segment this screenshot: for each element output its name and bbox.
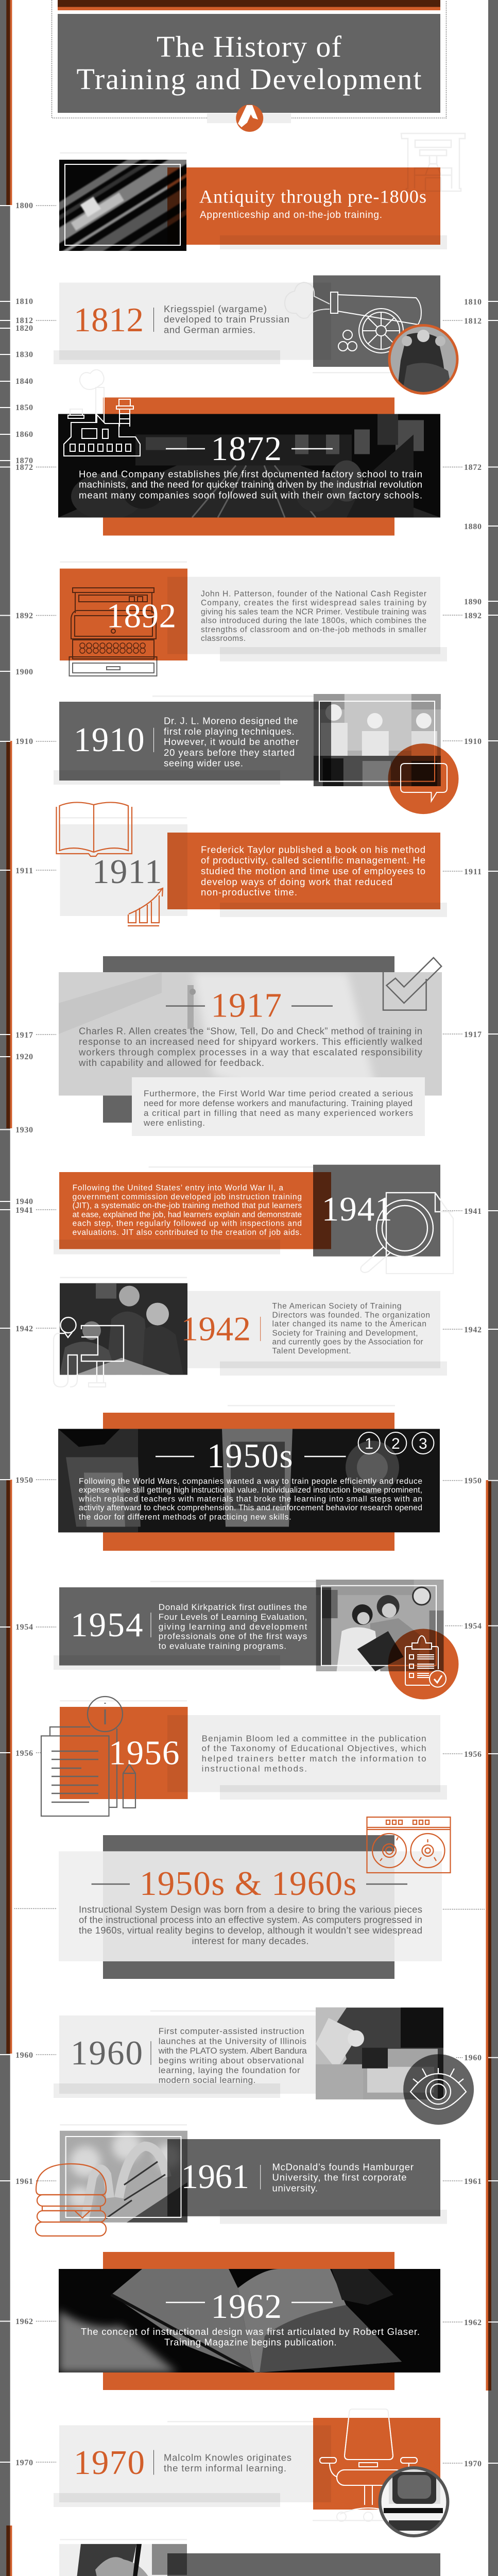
right year ticks and labels: 1956 bbox=[464, 1750, 482, 1759]
left year ticks and labels: 1941 bbox=[15, 1206, 33, 1215]
left year ticks and labels: 1812 bbox=[15, 316, 33, 325]
text: job instruction training: (JIT), a systematic on-the-job training method that put learners bbox=[73, 1201, 302, 1210]
text: glaser bbox=[81, 2326, 420, 2348]
text: hoe and company: machinists, and the need for quicker training driven by the industrial revolution bbox=[79, 479, 422, 490]
panel: 1910 grey bbox=[59, 702, 331, 781]
year: 1956: 1956 bbox=[109, 1734, 179, 1772]
text: allen: Charles R. Allen creates the “Show, Tell, Do and Check” method of training in bbox=[79, 1025, 422, 1036]
photo: couple with book bbox=[316, 1580, 444, 1671]
text: kirkpatrick: professionals one of the first ways bbox=[159, 1632, 307, 1641]
left year ticks and labels: 1970 bbox=[15, 2459, 33, 2467]
photo: desk with floppy disks bbox=[316, 2007, 443, 2099]
right year ticks and labels: 1880 bbox=[464, 522, 482, 531]
text: hamburger university: McDonald’s founds Hamburger bbox=[272, 2162, 414, 2172]
year: 1942: 1942 bbox=[181, 1310, 251, 1348]
title panel bbox=[58, 14, 440, 113]
left year ticks and labels: 1920 bbox=[15, 1053, 33, 1061]
text: hamburger university: university. bbox=[272, 2182, 318, 2193]
heading: antiquity: Antiquity through pre-1800s bbox=[199, 187, 426, 207]
left year ticks and labels: 1950 bbox=[15, 1476, 33, 1485]
text: kirkpatrick: to evaluate training programs. bbox=[159, 1641, 286, 1651]
text: hamburger university: University, the first corporate bbox=[272, 2172, 407, 2183]
right year ticks and labels bbox=[443, 298, 498, 2576]
right year ticks and labels: 1950 bbox=[464, 1477, 482, 1485]
photo: workers bbox=[313, 694, 441, 786]
left year ticks and labels: 1917 bbox=[15, 1031, 33, 1040]
icon: printing press ghost bbox=[401, 133, 465, 191]
left year ticks and labels: 1954 bbox=[15, 1623, 33, 1632]
circle with speech bubble icon bbox=[388, 743, 458, 814]
text: kriegsspiel: developed to train Prussian bbox=[164, 314, 289, 325]
icon: magnifier on document bbox=[360, 1193, 453, 1274]
text: patterson: giving his sales team the NCR Primer. Vestibule training was bbox=[201, 607, 426, 616]
icon: numbered circles: 3 bbox=[419, 1435, 427, 1452]
photo: vintage computer oval bbox=[380, 2468, 448, 2536]
text: american society bbox=[272, 1302, 430, 1355]
text: american society: The American Society of Training bbox=[272, 1302, 402, 1311]
text: bloom: helped trainers better match the information to bbox=[202, 1754, 426, 1764]
text: taylor: studied the motion and time use of employees to bbox=[201, 866, 425, 876]
text: plato and bandura bbox=[158, 2026, 307, 2085]
text: allen: with capability and allowed for feedback. bbox=[78, 1057, 264, 1068]
text: american society: Talent Development. bbox=[272, 1347, 351, 1355]
left year ticks and labels: 1860 bbox=[15, 430, 33, 439]
text: bloom: instructional methods. bbox=[202, 1764, 307, 1773]
photo: shipyard bbox=[59, 972, 442, 1095]
circle with clipboard icon bbox=[388, 1629, 458, 1699]
text: first world war bbox=[143, 1089, 413, 1128]
text: moreno: first role playing techniques. bbox=[164, 726, 295, 737]
text: taylor: non-productive time. bbox=[201, 887, 297, 897]
text: moreno: seeing wider use. bbox=[164, 757, 243, 769]
text: hoe and company: meant many companies soon followed suit with their own factory schools. bbox=[79, 489, 422, 500]
text: moreno: Dr. J. L. Moreno designed the bbox=[164, 715, 298, 726]
right year ticks and labels: 1810 bbox=[464, 298, 482, 307]
text: instructional system design bbox=[79, 1904, 422, 1946]
year: 1911: 1911 bbox=[92, 853, 162, 891]
text: hoe and company: Hoe and Company establishes the first documented factory school to train bbox=[79, 468, 422, 479]
text: american society: and currently goes by the Association for bbox=[272, 1338, 423, 1347]
text: moreno: 20 years before they started bbox=[164, 747, 295, 758]
text: patterson: classrooms. bbox=[201, 634, 246, 643]
text: knowles bbox=[164, 2452, 291, 2473]
icon: numbered circles bbox=[358, 1432, 434, 1454]
photo: hand writing bbox=[59, 2544, 187, 2576]
text: patterson: John H. Patterson, founder of the National Cash Register bbox=[201, 589, 426, 599]
heading: 1950s and 1960s: 1950s & 1960s bbox=[140, 1865, 356, 1903]
section: 1917 bbox=[59, 956, 442, 1136]
text: hoe and company bbox=[79, 468, 422, 500]
left year ticks and labels: 1930 bbox=[15, 1126, 33, 1134]
text: allen: workers through complex processes in a way that escalated responsibility bbox=[78, 1047, 423, 1058]
icon: presenter with board bbox=[54, 1317, 124, 1387]
text: job instruction training: government commission developed job instruction training bbox=[73, 1193, 302, 1201]
right year ticks and labels: 1941 bbox=[464, 1207, 482, 1216]
text: job instruction training: evaluations. JIT also contributed to the creation of job aids. bbox=[73, 1228, 302, 1237]
text: moreno: However, it would be another bbox=[164, 736, 299, 747]
year: 1950s: 1950s bbox=[207, 1437, 293, 1475]
text: taylor: Frederick Taylor published a book on his method bbox=[201, 844, 425, 855]
section: 1812 bbox=[54, 275, 457, 397]
left year ticks and labels: 1911 bbox=[15, 867, 33, 875]
year: 1954: 1954 bbox=[71, 1606, 143, 1644]
icon: bulb, documents and pencil bbox=[41, 1697, 135, 1816]
text: job instruction training: at ease, explained the job, had learners explain and demonstrate bbox=[73, 1211, 302, 1219]
left year ticks and labels: 1962 bbox=[15, 2317, 33, 2326]
text: bloom: Benjamin Bloom led a committee in the publication bbox=[202, 1734, 426, 1743]
panel: 1954 grey bbox=[59, 1587, 331, 1666]
text: individualized instruction bbox=[78, 1477, 422, 1521]
left year ticks and labels: 1870 bbox=[15, 456, 33, 465]
section: 1872 bbox=[58, 370, 440, 536]
photo: open book bbox=[59, 2269, 440, 2372]
text: instructional system design: of the instructional process into an effective system. As computers progressed in bbox=[79, 1914, 422, 1925]
icon: office chair bbox=[320, 2409, 417, 2521]
year: 1941: 1941 bbox=[322, 1190, 392, 1228]
photo: portrait oval bbox=[389, 325, 457, 397]
text: first world war: a critical part in filling that need as many experienced workers bbox=[144, 1108, 413, 1118]
icon: laser disc player bbox=[367, 1817, 450, 1873]
text: kriegsspiel: Kriegsspiel (wargame) bbox=[164, 303, 267, 314]
year: 1892: 1892 bbox=[107, 597, 176, 635]
left year ticks and labels: 1942 bbox=[15, 1325, 33, 1333]
panel: 1983 grey bbox=[167, 2553, 440, 2576]
text: kirkpatrick bbox=[159, 1602, 307, 1651]
text: bloom bbox=[202, 1734, 426, 1773]
year: 1917: 1917 bbox=[211, 987, 282, 1025]
title: The History of bbox=[157, 30, 342, 63]
right year ticks and labels: 1954 bbox=[464, 1622, 482, 1631]
text: allen bbox=[78, 1025, 423, 1068]
panel: first world war bbox=[132, 1077, 425, 1136]
left year ticks and labels: 1872 bbox=[15, 463, 33, 472]
panel: 1961 grey bbox=[167, 2139, 440, 2216]
circle with eye icon bbox=[403, 2054, 474, 2125]
right year ticks and labels: 1962 bbox=[464, 2318, 482, 2327]
text: individualized instruction: the door for different methods of practicing new skills. bbox=[79, 1513, 291, 1521]
icon: cash register bbox=[69, 588, 157, 676]
right year ticks and labels: 1961 bbox=[464, 2177, 482, 2186]
section: 1960 bbox=[54, 2008, 474, 2125]
section: 1961 bbox=[36, 2124, 447, 2236]
text: plato and bandura: with the PLATO system. Albert Bandura bbox=[158, 2046, 307, 2056]
text: american society: Society for Training and Development, bbox=[272, 1329, 418, 1337]
text: taylor bbox=[201, 844, 425, 897]
photo: golden arches bbox=[60, 2131, 187, 2223]
left year ticks and labels: 1830 bbox=[15, 350, 33, 359]
right year ticks and labels: 1942 bbox=[464, 1326, 482, 1334]
right year ticks and labels: 1911 bbox=[464, 868, 482, 876]
year: 1872: 1872 bbox=[211, 430, 282, 468]
text: allen: response to an increased need for shipyard workers. This efficiently walked bbox=[79, 1036, 422, 1047]
text: instructional system design: Instructional System Design was born from a desire to bring the various pieces bbox=[79, 1904, 422, 1914]
text: glaser: Training Magazine begins publication. bbox=[164, 2337, 337, 2348]
left year ticks and labels bbox=[0, 201, 57, 2576]
icon: numbered circles: 2 bbox=[391, 1435, 400, 1452]
text: job instruction training: each step, then regularly followed up with inspections and bbox=[73, 1219, 302, 1228]
left year ticks and labels: 1961 bbox=[15, 2177, 33, 2186]
icon: logo bbox=[236, 105, 263, 132]
year: 1812: 1812 bbox=[74, 301, 144, 339]
icon: open book bbox=[57, 802, 132, 856]
right year ticks and labels: 1892 bbox=[464, 612, 482, 620]
text: hamburger university bbox=[272, 2162, 414, 2193]
photo: training meeting bbox=[60, 1283, 187, 1375]
text: knowles: the term informal learning. bbox=[164, 2463, 286, 2473]
left year ticks and labels: 1910 bbox=[15, 737, 33, 746]
text: taylor: of productivity, called scientific management. He bbox=[201, 855, 425, 866]
text: patterson: also introduced during the late 1800s, which combines the bbox=[201, 617, 426, 625]
text: kirkpatrick: Donald Kirkpatrick first outlines the bbox=[159, 1602, 307, 1612]
section: 1892 bbox=[60, 562, 447, 676]
text: first world war: were enlisting. bbox=[143, 1118, 205, 1128]
section: antiquity bbox=[32, 126, 465, 285]
section: 1911 bbox=[57, 802, 447, 926]
text: individualized instruction: expense while still getting high instructional value. Individualized instruction became prominent, bbox=[79, 1486, 422, 1495]
panel: antiquity orange bbox=[167, 167, 440, 245]
year: 1910: 1910 bbox=[74, 721, 145, 759]
text: instructional system design: the 1960s, virtual reality begins to develop, although it wouldn’t see widespread bbox=[79, 1925, 422, 1936]
left year ticks and labels: 1956 bbox=[15, 1749, 33, 1758]
section: 1983 bbox=[59, 2539, 447, 2576]
text: american society: Directors was founded. The organization bbox=[272, 1311, 430, 1320]
text: patterson: Company, creates the first widespread sales training by bbox=[201, 599, 426, 607]
icon: rising chart bbox=[128, 888, 163, 926]
right year ticks and labels: 1910 bbox=[464, 737, 482, 746]
right year ticks and labels: 1960 bbox=[464, 2054, 482, 2062]
icon: smoke ghost bbox=[285, 282, 330, 318]
text: apprenticeship: Apprenticeship and on-the-job training. bbox=[200, 210, 382, 221]
text: plato and bandura: First computer-assisted instruction bbox=[159, 2026, 304, 2036]
text: kriegsspiel: and German armies. bbox=[164, 325, 255, 335]
icon: checkmark bbox=[383, 958, 441, 1010]
text: moreno bbox=[164, 715, 299, 769]
text: plato and bandura: modern social learning. bbox=[159, 2075, 255, 2085]
left year ticks and labels: 1800 bbox=[15, 201, 33, 210]
header block: Training and Development bbox=[76, 62, 421, 96]
year: 1960: 1960 bbox=[71, 2034, 143, 2072]
text: job instruction training: Following the United States’ entry into World War II, a bbox=[73, 1183, 283, 1192]
year: 1970: 1970 bbox=[74, 2444, 145, 2482]
right year ticks and labels: 1872 bbox=[464, 463, 482, 472]
text: plato and bandura: begins writing about observational bbox=[159, 2056, 304, 2065]
left year ticks and labels: 1820 bbox=[15, 324, 33, 333]
text: american society: later changed its name to the American bbox=[272, 1320, 426, 1329]
text: instructional system design: interest for many decades. bbox=[192, 1935, 309, 1946]
section: 1941 bbox=[54, 1165, 453, 1274]
section: 1954 bbox=[54, 1580, 458, 1699]
header block bbox=[51, 0, 446, 132]
text: kirkpatrick: giving learning and development bbox=[159, 1622, 307, 1632]
section: 1950s and 1960s bbox=[59, 1817, 450, 1979]
section: 1956 bbox=[41, 1697, 447, 1816]
text: kirkpatrick: Four Levels of Learning Evaluation, bbox=[159, 1612, 307, 1622]
year: 1961: 1961 bbox=[181, 2158, 249, 2196]
icon: cannon bbox=[331, 292, 421, 353]
left year ticks and labels: 1810 bbox=[15, 297, 33, 306]
left year ticks and labels: 1840 bbox=[15, 377, 33, 386]
right year ticks and labels: 1890 bbox=[464, 598, 482, 606]
photo: metal type bbox=[59, 160, 186, 251]
text: plato and bandura: learning, laying the foundation for bbox=[159, 2065, 300, 2075]
left year ticks and labels: 1900 bbox=[15, 668, 33, 676]
text: glaser: The concept of instructional design was first articulated by Robert Glaser. bbox=[81, 2326, 420, 2337]
right year ticks and labels: 1812 bbox=[464, 317, 482, 326]
text: individualized instruction: Following the World Wars, companies wanted a way to train people efficiently and reduce bbox=[79, 1477, 422, 1486]
text: first world war: Furthermore, the First World War time period created a serious bbox=[144, 1089, 413, 1098]
right year ticks and labels: 1917 bbox=[464, 1030, 482, 1039]
text: plato and bandura: launches at the University of Illinois bbox=[159, 2037, 306, 2046]
text: individualized instruction: activity afterward to check comprehension. This and reinforcement behavior research opened bbox=[79, 1504, 422, 1513]
section: 1942 bbox=[54, 1277, 447, 1387]
text: patterson: strengths of classroom and on-the-job methods in smaller bbox=[201, 625, 426, 634]
photo: desk with papers bbox=[58, 1429, 440, 1532]
text: first world war: need for more defense workers and manufacturing. Training played bbox=[144, 1098, 413, 1108]
right year ticks and labels: 1970 bbox=[464, 2460, 482, 2468]
text: taylor: develop ways of doing work that reduced bbox=[201, 876, 392, 887]
text: job instruction training bbox=[73, 1183, 302, 1237]
icon: burger bbox=[36, 2164, 106, 2236]
text: knowles: Malcolm Knowles originates bbox=[164, 2452, 291, 2463]
section: 1962 bbox=[59, 2252, 440, 2390]
icon: factory bbox=[64, 370, 140, 456]
section: 1910 bbox=[54, 694, 458, 814]
year: 1962: 1962 bbox=[211, 2287, 282, 2326]
text: kriegsspiel bbox=[164, 303, 289, 335]
icon: numbered circles: 1 bbox=[365, 1435, 373, 1452]
section: 1950s bbox=[58, 1405, 440, 1551]
text: bloom: of the Taxonomy of Educational Objectives, which bbox=[202, 1743, 426, 1753]
left year ticks and labels: 1940 bbox=[15, 1197, 33, 1206]
section: 1970 bbox=[54, 2409, 448, 2536]
text: individualized instruction: which replaced teachers with materials that broke the learning into small steps with an bbox=[78, 1495, 422, 1503]
text: patterson bbox=[201, 589, 426, 643]
left year ticks and labels: 1850 bbox=[15, 403, 33, 412]
photo: factory floor bbox=[58, 414, 440, 517]
left year ticks and labels: 1892 bbox=[15, 612, 33, 620]
left year ticks and labels: 1960 bbox=[15, 2051, 33, 2060]
